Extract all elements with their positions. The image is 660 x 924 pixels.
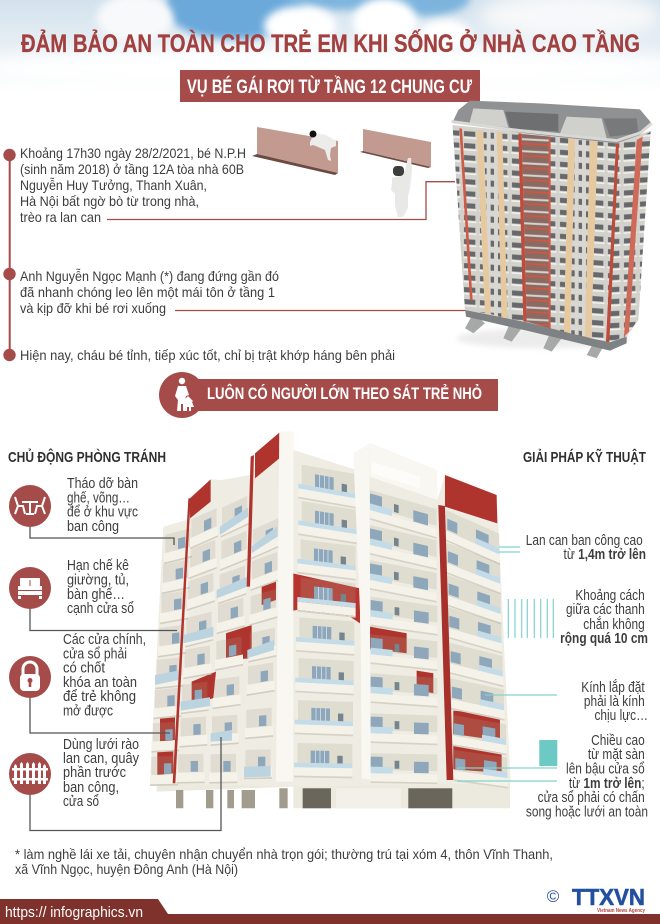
text: window height: cửa sổ phải có chấn [538,789,645,805]
text: window height: song hoặc lưới an toàn [526,803,648,820]
teal window height block [539,740,557,766]
logo: TTXVN: © [547,887,560,906]
facade window bands [453,127,485,313]
text: limit furniture: Hạn chế kê [67,558,129,574]
roof [453,101,652,143]
text: window height: Chiều cao [591,732,645,748]
text: railing height: Lan can ban công cao [526,532,643,548]
text: safety locks: Các cửa chính, [63,632,146,648]
timeline [3,149,16,361]
leader lines from text to building [107,182,466,310]
text: safety locks: mở được [63,704,113,720]
icon: fence [9,753,51,795]
text: rescuer: đã nhanh chóng leo lên một mái tôn ở tầng 1 [20,284,275,300]
text: tempered glass: phải là kính [584,693,645,709]
text: safety locks: có chốt [63,660,105,676]
footnote: xã Vĩnh Ngọc, huyện Đông Anh (Hà Nội) [15,861,238,877]
text: limit furniture: bàn ghế… [67,587,125,603]
subtitle banner [180,70,480,102]
facade base [453,125,651,342]
illustration: apartment building with balconies [150,432,511,808]
icon: table and chairs [9,485,51,527]
text: event description: (sinh năm 2018) ở tầng 12A tòa nhà 60B [20,161,244,177]
text: use netting: lan can, quây [63,751,140,767]
text: event description: Nguyễn Huy Tưởng, Thanh Xuân, [20,177,207,193]
text: remove furniture: Tháo dỡ bàn [67,476,138,492]
icon: padlock [9,656,51,698]
text: rescuer: và kịp đỡ khi bé rơi xuống [20,300,166,316]
text: limit furniture: cạnh cửa sổ [67,601,134,617]
white pillars and roof frame [276,432,437,782]
banner: always have an adult with small children: LUÔN CÓ NGƯỜI LỚN THEO SÁT TRẺ NHỎ [207,384,482,403]
text: railing height [526,532,646,562]
text: bar spacing: giữa các thanh [566,601,645,617]
text: window height: từ mặt sàn [588,746,645,762]
text: window height [526,732,648,820]
text: safety locks: cửa sổ phải [63,646,127,662]
centre-right balconies [370,490,437,784]
ground shadow [457,328,630,348]
banner: always have an adult with small children [159,372,498,418]
logo: TTXVN [547,884,646,914]
text: current condition: Hiện nay, cháu bé tỉnh, tiếp xúc tốt, chỉ bị trật khớp háng bên phải [20,347,395,363]
illustration: high-rise apartment block [452,101,652,358]
text: event description: Hà Nội bất ngờ bò từ trong nhà, [20,193,199,209]
left face red panels [157,433,279,775]
text: limit furniture: giường, tủ, [67,572,129,588]
text: remove furniture: ghế, võng… [67,490,130,506]
left face glass balcony rails [155,507,277,777]
footer bar [0,899,660,924]
centre-right red panels [370,627,433,693]
logo: TTXVN: TTXVN [572,884,645,910]
footer bar: https:// infographics.vn [5,904,143,921]
text: safety locks: để trẻ không [63,689,136,705]
text: safety locks: khóa an toàn [63,675,137,691]
left column connector lines [30,527,221,830]
plinth [465,308,627,351]
text: event description: trèo ra lan can [20,209,101,225]
text: tempered glass [581,679,648,723]
central red stair column [522,134,550,328]
centre-left balconies [294,464,357,778]
footnote: * làm nghề lái xe tải, chuyên nhận chuyển nhà trọn gói; thường trú tại xóm 4, thôn Vĩnh Thanh, [15,846,553,862]
background sky with clouds [0,0,660,92]
text: rescuer: Anh Nguyễn Ngọc Mạnh (*) đang đứng gần đó [20,268,279,284]
subtitle banner: VỤ BÉ GÁI RƠI TỪ TẦNG 12 CHUNG CƯ [187,76,472,98]
text: use netting: phần trước [63,765,126,781]
text: remove furniture: ban công [67,519,119,535]
text: tempered glass: chịu lực… [594,707,648,723]
left face balconies [150,495,280,786]
text: event description: Khoảng 17h30 ngày 28/2/2021, bé N.P.H [20,145,246,161]
text: remove furniture: để ở khu vực [67,504,138,520]
teal callout markers [457,547,557,781]
right face balconies [446,510,508,789]
text: bar spacing [560,587,648,646]
centre red panel [288,572,360,623]
text: bar spacing: rộng quá 10 cm [560,630,648,646]
text: bar spacing: chắn không [583,616,645,632]
heading: proactive prevention: CHỦ ĐỘNG PHÒNG TRÁNH [8,448,166,466]
text: use netting: Dùng lưới rào [63,737,139,753]
text: window height: từ 1m trở lên; [569,775,645,791]
red and tan vertical stripes [459,128,473,301]
text: bar spacing: Khoảng cách [575,587,645,603]
left face red stripes [173,455,254,783]
icon: mother and child [175,378,194,411]
illustration: railing with child hanging [360,129,431,217]
right red stripe [438,505,453,780]
text: use netting: cửa sổ [63,794,99,810]
text: use netting: ban công, [63,780,119,796]
illustration: railing with child climbing [252,127,338,175]
building feet [465,313,603,358]
icon: bed [9,567,51,609]
text: railing height: từ 1,4m trở lên [564,546,646,562]
ground floor [157,782,510,808]
text: window height: lên bậu cửa sổ [566,760,645,777]
logo: TTXVN: Vietnam News Agency [597,908,646,914]
main massing [150,432,511,787]
text: tempered glass: Kính lắp đặt [581,679,645,695]
right face red panels [445,475,502,773]
